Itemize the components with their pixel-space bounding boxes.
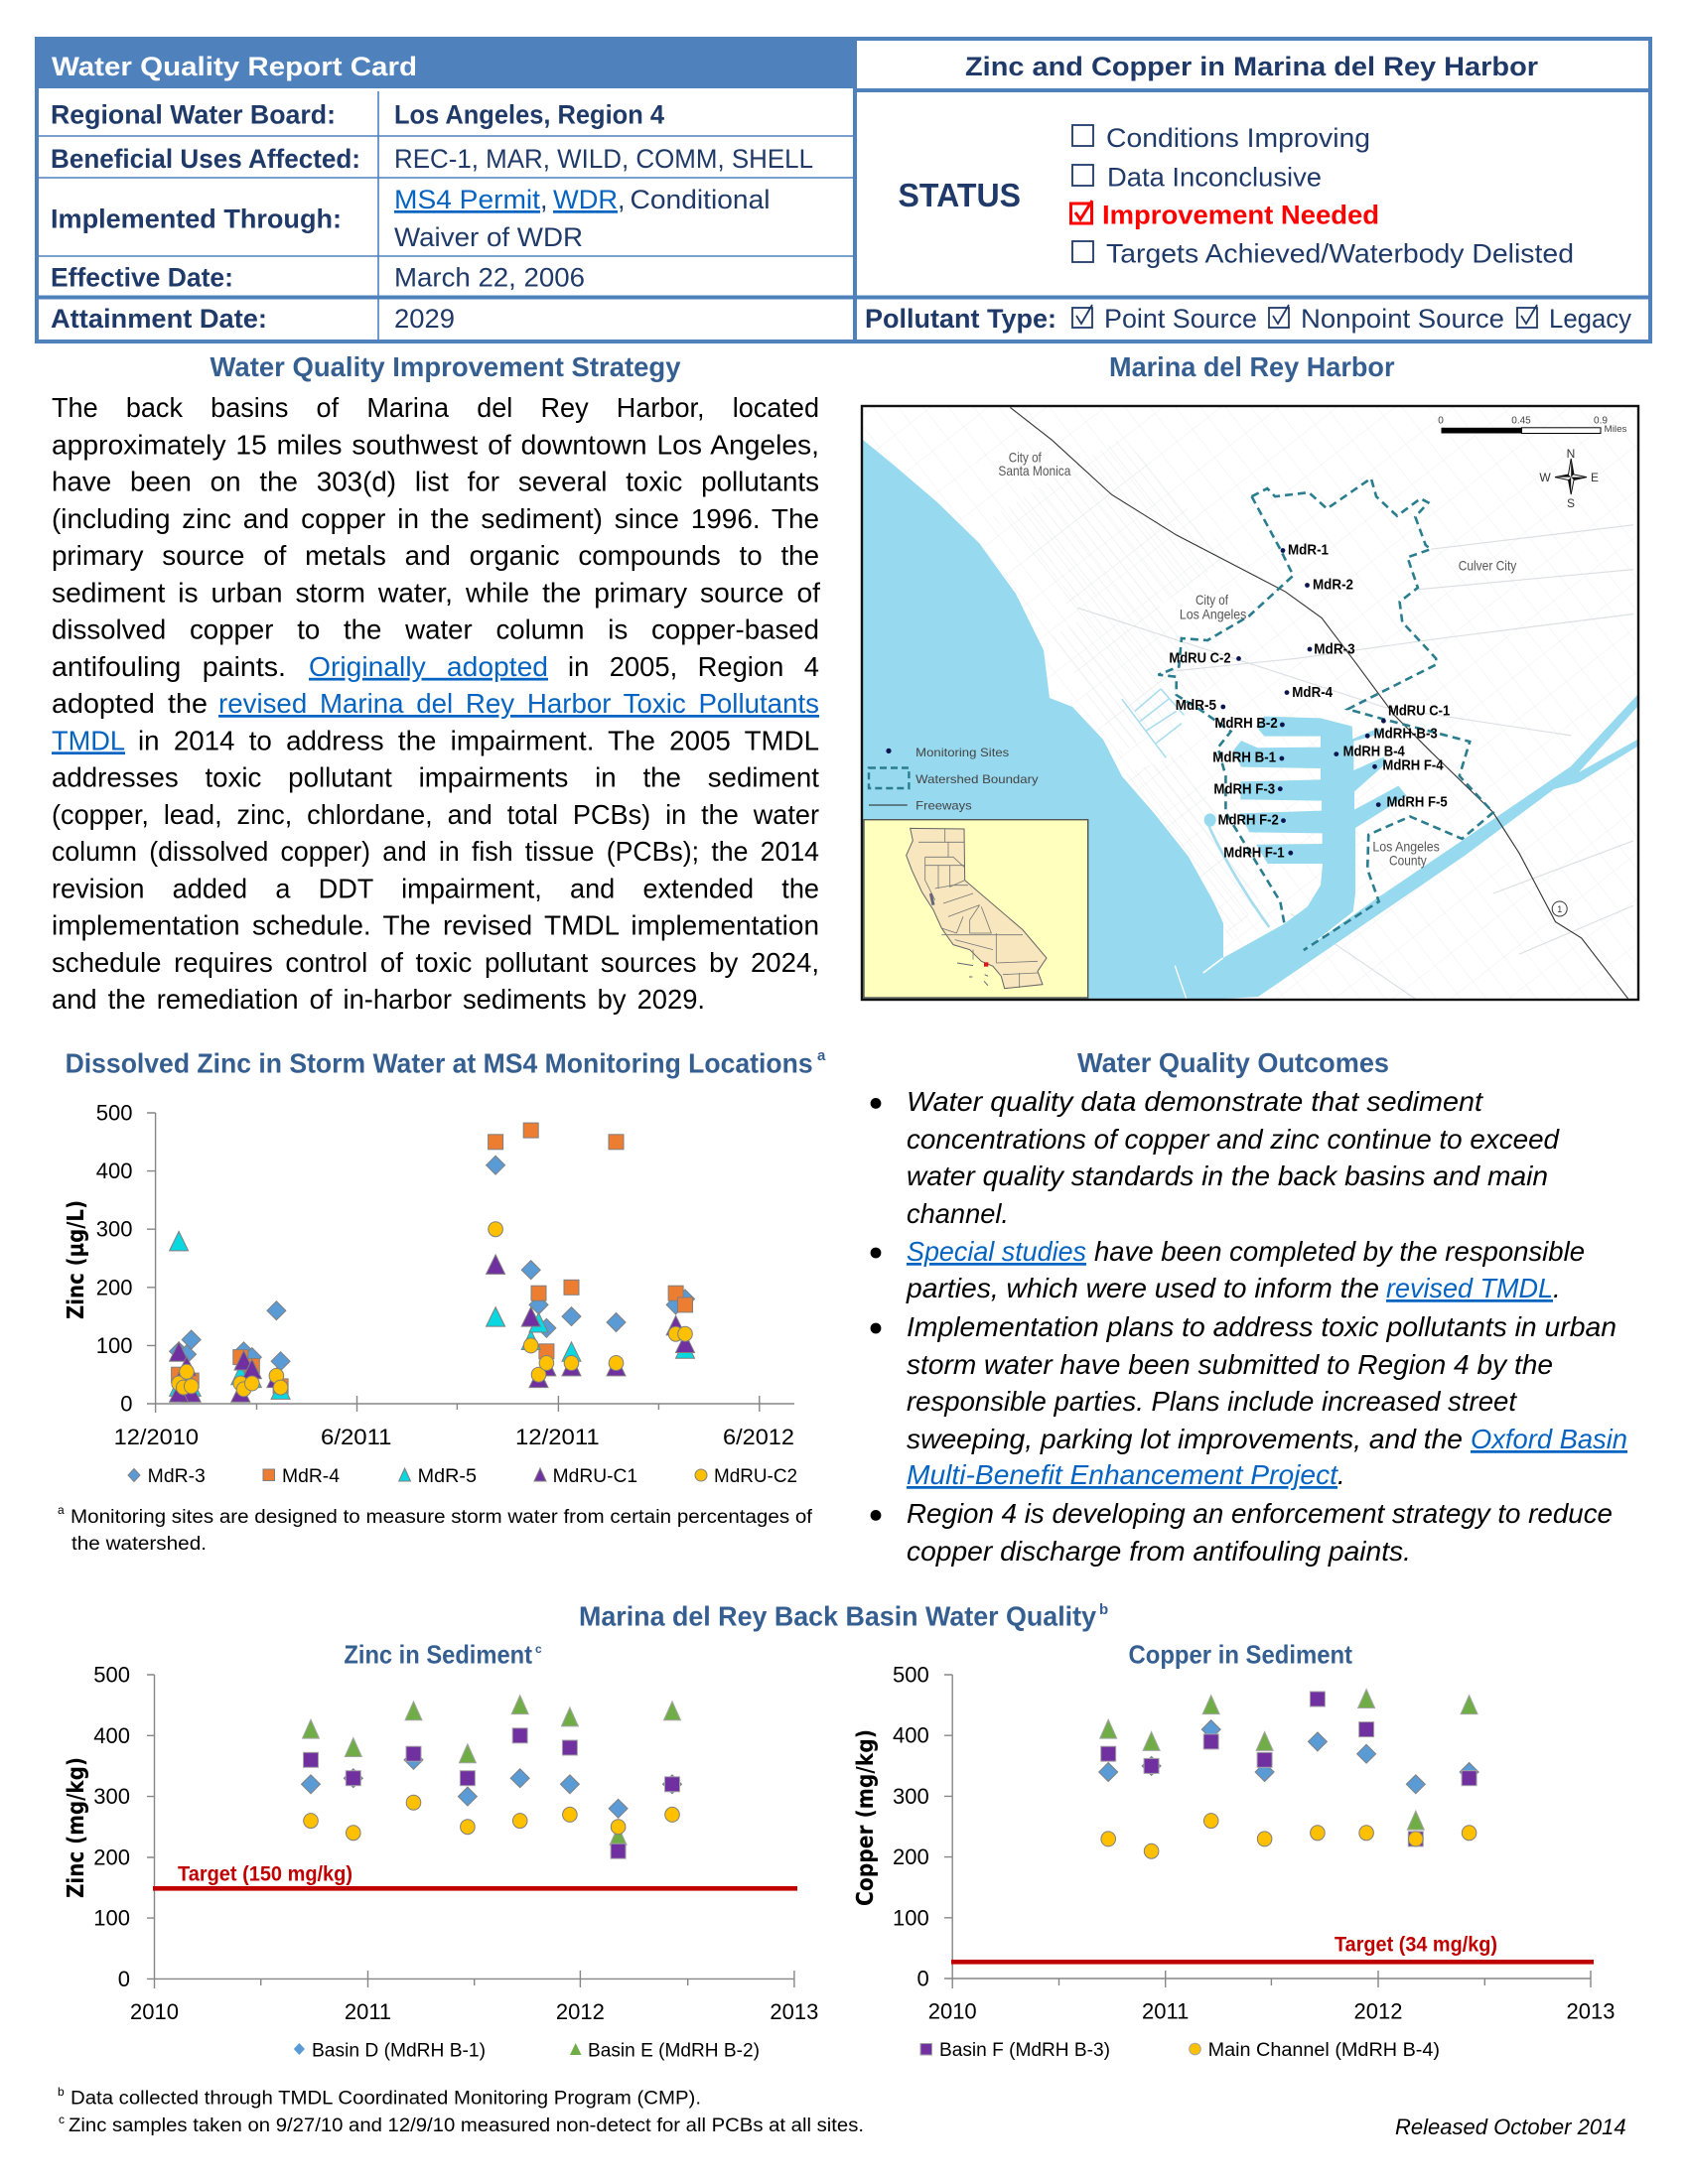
row: attainment date: Attainment Date: bbox=[51, 304, 267, 334]
row: implemented through: MS4 Permit bbox=[394, 185, 541, 214]
footnotes b and c: Data collected through TMDL Coordinated Monitoring Program (CMP). bbox=[70, 2089, 701, 2110]
monitoring sites: MdR-5 bbox=[1176, 697, 1216, 714]
outcome 3: sweeping, parking lot improvements, and the bbox=[907, 1424, 1463, 1454]
strategy paragraph: adopted the bbox=[52, 688, 208, 719]
chart title: c bbox=[535, 1642, 542, 1656]
row: attainment date bbox=[51, 304, 455, 334]
row: regional water board: Regional Water Board: bbox=[51, 99, 336, 129]
place names bbox=[998, 449, 1516, 868]
strategy paragraph: column (dissolved copper) and in fish tissue (PCBs); the 2014 bbox=[52, 836, 819, 867]
legend: MdR-5 bbox=[418, 1466, 477, 1487]
footnotes b and c: b bbox=[58, 2085, 65, 2099]
legend: MdRU-C1 bbox=[553, 1466, 637, 1487]
series: MdRU-C2 bbox=[172, 1222, 692, 1397]
y-axis labels bbox=[96, 1100, 133, 1416]
status: data inconclusive: Data Inconclusive bbox=[1107, 163, 1322, 193]
series: Basin F bbox=[1101, 1692, 1477, 1846]
row: attainment date: 2029 bbox=[394, 304, 455, 334]
map panel bbox=[861, 405, 1639, 1001]
y-axis labels: 200 bbox=[96, 1275, 133, 1299]
outcome 4 bbox=[907, 1498, 1613, 1567]
outcome 3: Multi-Benefit Enhancement Project bbox=[907, 1459, 1338, 1490]
legend bbox=[920, 2040, 1440, 2061]
y-axis labels: 500 bbox=[93, 1662, 130, 1688]
y-axis title: Zinc (mg/kg) bbox=[64, 1757, 89, 1898]
outcome 4: copper discharge from antifouling paints. bbox=[907, 1536, 1411, 1567]
row: implemented through: Waiver of WDR bbox=[394, 222, 583, 252]
chart title: Copper in Sediment bbox=[1128, 1640, 1352, 1670]
status heading: STATUS bbox=[898, 177, 1021, 213]
legend: Basin F (MdRH B-3) bbox=[939, 2040, 1110, 2061]
row: beneficial uses: REC-1, MAR, WILD, COMM, SHELL bbox=[394, 144, 813, 174]
icon: compass: S bbox=[1567, 496, 1575, 510]
release date: Released October 2014 bbox=[1395, 2115, 1626, 2139]
strategy paragraph: sediment is urban storm water, while the primary source of bbox=[52, 577, 820, 608]
place names: Culver City bbox=[1459, 557, 1516, 573]
y-axis labels: 300 bbox=[93, 1784, 130, 1809]
x-axis labels: 2010 bbox=[130, 1999, 179, 2024]
strategy paragraph: TMDL bbox=[52, 725, 125, 755]
strategy paragraph: revision added a DDT impairment, and extended the bbox=[52, 873, 819, 903]
monitoring sites: MdRH F-4 bbox=[1382, 757, 1444, 774]
target line bbox=[153, 1886, 797, 1891]
y-axis labels bbox=[93, 1662, 130, 1991]
chart: copper in sediment bbox=[853, 1640, 1615, 2061]
y-axis labels: 300 bbox=[96, 1217, 133, 1242]
series: Basin E bbox=[1100, 1690, 1477, 1830]
legend: MdR-3 bbox=[148, 1466, 206, 1487]
footnotes b and c: c bbox=[59, 2113, 65, 2126]
outcome 2: revised TMDL bbox=[1386, 1273, 1553, 1303]
x-axis labels bbox=[130, 1999, 818, 2024]
x-axis labels: 12/2010 bbox=[114, 1425, 199, 1449]
outcome 3 bbox=[907, 1311, 1627, 1490]
place names: County bbox=[1389, 852, 1427, 868]
strategy paragraph bbox=[52, 392, 820, 1015]
row: beneficial uses: Beneficial Uses Affected: bbox=[51, 144, 360, 174]
status: improvement needed: Improvement Needed bbox=[1102, 201, 1379, 230]
y-axis labels: 400 bbox=[893, 1723, 929, 1748]
series: Basin E bbox=[302, 1696, 681, 1844]
icon: compass: E bbox=[1591, 471, 1599, 484]
map legend: Freeways bbox=[915, 798, 972, 812]
monitoring sites: MdRU C-2 bbox=[1169, 649, 1231, 666]
y-axis labels: 300 bbox=[893, 1784, 929, 1809]
y-axis title: Zinc (µg/L) bbox=[64, 1200, 89, 1319]
axes bbox=[147, 1113, 794, 1413]
monitoring sites: MdRH B-1 bbox=[1212, 749, 1276, 765]
target label: Target (34 mg/kg) bbox=[1335, 1934, 1497, 1957]
target line bbox=[951, 1960, 1594, 1965]
axes bbox=[944, 1675, 1591, 1988]
icon: empty checkbox bbox=[1072, 125, 1093, 146]
outcome 2: . bbox=[1553, 1273, 1561, 1303]
monitoring sites: MdR-2 bbox=[1313, 577, 1353, 594]
strategy paragraph: in 2014 to address the impairment. The 2005 TMDL bbox=[138, 725, 819, 755]
y-axis labels: 100 bbox=[96, 1333, 133, 1358]
row: regional water board bbox=[51, 99, 664, 129]
icon: compass: W bbox=[1539, 471, 1551, 484]
strategy paragraph: approximately 15 miles southwest of downtown Los Angeles, bbox=[52, 429, 819, 460]
row: implemented through: Conditional bbox=[630, 185, 771, 214]
pollutant type row: Point Source bbox=[1104, 304, 1257, 334]
strategy paragraph: (including zinc and copper in the sediment) since 1996. The bbox=[52, 503, 819, 534]
place names: City of bbox=[1009, 449, 1042, 465]
heading: map: Marina del Rey Harbor bbox=[1109, 351, 1395, 382]
y-axis labels: 200 bbox=[93, 1844, 130, 1869]
strategy paragraph: have been on the 303(d) list for several toxic pollutants bbox=[52, 467, 819, 496]
legend bbox=[294, 2041, 760, 2061]
watershed boundary bbox=[1158, 478, 1493, 950]
chart title: Zinc in Sediment bbox=[344, 1639, 532, 1669]
legend bbox=[128, 1466, 797, 1487]
row: effective date: Effective Date: bbox=[51, 263, 233, 293]
icon: empty checkbox bbox=[1072, 241, 1093, 262]
monitoring sites: MdRH F-2 bbox=[1218, 812, 1279, 829]
outcome 2 bbox=[906, 1236, 1585, 1303]
heading: dissolved zinc chart: Dissolved Zinc in Storm Water at MS4 Monitoring Locations bbox=[66, 1047, 813, 1078]
x-axis labels: 2012 bbox=[556, 1999, 605, 2024]
monitoring sites: MdR-3 bbox=[1314, 641, 1355, 657]
outcome 3: Oxford Basin bbox=[1471, 1424, 1627, 1454]
monitoring sites bbox=[1169, 542, 1450, 862]
footnote a: the watershed. bbox=[71, 1534, 207, 1555]
pollutant type row: Pollutant Type: bbox=[865, 304, 1056, 334]
row: implemented through: Implemented Through: bbox=[51, 205, 342, 234]
series: Main Channel bbox=[304, 1795, 679, 1841]
outcome 3: responsible parties. Plans include increased street bbox=[907, 1386, 1517, 1417]
strategy paragraph: dissolved copper to the water column is copper-based bbox=[52, 614, 819, 645]
monitoring sites: MdR-1 bbox=[1288, 542, 1329, 558]
status: targets achieved: Targets Achieved/Waterbody Delisted bbox=[1106, 238, 1574, 268]
y-axis labels: 0 bbox=[118, 1967, 130, 1991]
place names: Los Angeles bbox=[1372, 839, 1440, 855]
ocean bbox=[863, 440, 1223, 999]
y-axis labels: 0 bbox=[120, 1392, 133, 1416]
y-axis labels: 100 bbox=[93, 1906, 130, 1931]
outcome 2: Special studies bbox=[907, 1236, 1086, 1267]
map legend: Monitoring Sites bbox=[915, 746, 1009, 759]
footnote a: a bbox=[58, 1503, 65, 1517]
status checklist bbox=[1070, 123, 1574, 268]
row: implemented through bbox=[51, 185, 771, 252]
x-axis labels: 2011 bbox=[345, 1999, 391, 2024]
series: MdRU-C1 bbox=[170, 1255, 695, 1402]
heading: back basin section: b bbox=[1099, 1601, 1108, 1618]
row: implemented through: , bbox=[540, 185, 548, 214]
icon: route 1 shield bbox=[1552, 901, 1567, 916]
outcome 3: . bbox=[1337, 1459, 1345, 1490]
y-axis title: Copper (mg/kg) bbox=[853, 1729, 879, 1906]
icon: route 1 shield: 1 bbox=[1557, 904, 1562, 914]
y-axis labels: 400 bbox=[96, 1159, 133, 1183]
California locator inset bbox=[864, 820, 1088, 998]
monitoring sites: MdRH B-4 bbox=[1343, 744, 1405, 760]
series: Main Channel bbox=[1101, 1814, 1477, 1858]
panel: table frame bbox=[35, 37, 1652, 343]
strategy paragraph: (copper, lead, zinc, chlordane, and total PCBs) in the water bbox=[52, 799, 819, 830]
monitoring sites: MdRH F-1 bbox=[1223, 845, 1285, 862]
bullets bbox=[871, 1098, 881, 1521]
strategy paragraph: implementation schedule. The revised TMDL implementation bbox=[52, 909, 819, 941]
map legend bbox=[869, 746, 1039, 812]
y-axis labels: 400 bbox=[93, 1723, 130, 1748]
monitoring sites: MdRH-B-3 bbox=[1374, 725, 1438, 742]
outcome 1: Water quality data demonstrate that sediment bbox=[907, 1086, 1483, 1117]
monitoring sites: MdR-4 bbox=[1292, 684, 1334, 701]
footnotes b and c: Zinc samples taken on 9/27/10 and 12/9/10 measured non-detect for all PCBs at all sites. bbox=[69, 2116, 864, 2136]
x-axis labels: 6/2012 bbox=[723, 1425, 794, 1449]
y-axis labels: 100 bbox=[893, 1905, 929, 1930]
outcome 4: Region 4 is developing an enforcement strategy to reduce bbox=[907, 1498, 1613, 1529]
x-axis labels: 6/2011 bbox=[321, 1425, 391, 1449]
heading: strategy: Water Quality Improvement Strategy bbox=[211, 351, 681, 382]
harbor water bbox=[1155, 717, 1407, 1000]
strategy paragraph: The back basins of Marina del Rey Harbor, located bbox=[52, 392, 819, 423]
strategy paragraph: schedule requires control of toxic pollutant sources by 2024, bbox=[52, 947, 819, 978]
venice canals bbox=[1122, 689, 1185, 757]
pollutant type row: Legacy bbox=[1549, 304, 1631, 334]
outcome 3: storm water have been submitted to Region 4 by the bbox=[907, 1349, 1553, 1380]
legend: Basin E (MdRH B-2) bbox=[588, 2041, 760, 2061]
table title: Water Quality Report Card bbox=[52, 52, 417, 81]
monitoring sites: MdRH F-3 bbox=[1213, 781, 1275, 798]
series: Basin D bbox=[1099, 1720, 1478, 1794]
x-axis labels: 2013 bbox=[1567, 1999, 1615, 2024]
map base bbox=[861, 405, 1639, 1001]
icon: empty checkbox bbox=[1072, 165, 1093, 186]
scale bar bbox=[1438, 416, 1627, 434]
axes bbox=[147, 1675, 794, 1988]
outcome 1: water quality standards in the back basins and main bbox=[907, 1160, 1548, 1191]
icon: compass bbox=[1539, 447, 1599, 510]
outcome 2: have been completed by the responsible bbox=[1094, 1236, 1585, 1267]
heading: dissolved zinc chart: a bbox=[817, 1047, 826, 1064]
row: beneficial uses bbox=[51, 144, 813, 174]
place names: City of bbox=[1196, 592, 1228, 608]
legend: Main Channel (MdRH B-4) bbox=[1208, 2040, 1440, 2061]
pollutant type row bbox=[865, 304, 1631, 334]
outcome 1 bbox=[907, 1086, 1561, 1229]
status: conditions improving: Conditions Improving bbox=[1106, 123, 1370, 153]
pollutant type row: Nonpoint Source bbox=[1301, 304, 1504, 334]
place names: Los Angeles bbox=[1180, 606, 1246, 621]
outcome 2: parties, which were used to inform the bbox=[906, 1273, 1379, 1303]
map legend: Watershed Boundary bbox=[915, 772, 1039, 786]
row: regional water board: Los Angeles, Region 4 bbox=[394, 99, 664, 129]
icon: compass: N bbox=[1567, 447, 1575, 461]
strategy paragraph: primary source of metals and organic compounds to the bbox=[52, 540, 819, 571]
outcome 1: concentrations of copper and zinc continue to exceed bbox=[907, 1124, 1561, 1155]
scale bar: Miles bbox=[1605, 424, 1627, 434]
monitoring sites: MdRH F-5 bbox=[1386, 794, 1448, 811]
footnote a: Monitoring sites are designed to measure storm water from certain percentages of bbox=[70, 1507, 813, 1528]
y-axis labels: 0 bbox=[916, 1966, 929, 1991]
chart: dissolved zinc bbox=[64, 1100, 797, 1487]
strategy paragraph: and the remediation of in-harbor sediments by 2029. bbox=[52, 984, 705, 1015]
footnote a bbox=[58, 1503, 813, 1555]
water quality outcomes bbox=[871, 1047, 1627, 1567]
monitoring sites: MdRU C-1 bbox=[1388, 703, 1450, 719]
creek bbox=[1223, 695, 1637, 999]
outcome 1: channel. bbox=[907, 1198, 1009, 1229]
place names: Santa Monica bbox=[998, 463, 1071, 478]
x-axis labels: 12/2011 bbox=[515, 1425, 600, 1449]
heading: back basin section: Marina del Rey Back Basin Water Quality bbox=[579, 1600, 1096, 1632]
strategy paragraph: addresses toxic pollutant impairments in the sediment bbox=[52, 762, 819, 792]
series: Basin D bbox=[302, 1750, 681, 1818]
map frame bbox=[862, 406, 1638, 1000]
row: effective date bbox=[51, 263, 585, 293]
freeway bbox=[1010, 407, 1628, 999]
legend: Basin D (MdRH B-1) bbox=[312, 2041, 486, 2061]
legend: MdR-4 bbox=[282, 1466, 340, 1487]
scale bar: 0.45 bbox=[1511, 416, 1531, 427]
footnotes b and c bbox=[58, 2085, 864, 2136]
monitoring sites: MdRH B-2 bbox=[1214, 715, 1278, 732]
series: MdR-5 bbox=[170, 1231, 695, 1399]
strategy paragraph: Originally adopted bbox=[309, 651, 548, 682]
series: Basin F bbox=[304, 1728, 679, 1858]
x-axis labels bbox=[114, 1425, 794, 1449]
y-axis labels: 200 bbox=[893, 1844, 929, 1869]
report card table bbox=[35, 37, 1652, 343]
series: MdR-3 bbox=[170, 1156, 695, 1371]
outcome 3: Implementation plans to address toxic pollutants in urban bbox=[907, 1311, 1617, 1342]
strategy paragraph: revised Marina del Rey Harbor Toxic Pollutants bbox=[218, 688, 819, 719]
strategy paragraph: in 2005, Region 4 bbox=[568, 651, 819, 682]
report title: Zinc and Copper in Marina del Rey Harbor bbox=[965, 52, 1539, 81]
series: MdR-4 bbox=[172, 1123, 693, 1394]
x-axis labels: 2012 bbox=[1354, 1999, 1402, 2024]
row: implemented through: , bbox=[618, 185, 626, 214]
y-axis labels: 500 bbox=[893, 1662, 929, 1688]
x-axis labels: 2013 bbox=[770, 1999, 818, 2024]
scale bar: 0 bbox=[1438, 416, 1444, 427]
scale bar: 0.9 bbox=[1594, 416, 1608, 427]
strategy paragraph: antifouling paints. bbox=[52, 651, 286, 682]
row: implemented through: WDR bbox=[553, 185, 618, 214]
x-axis labels: 2011 bbox=[1142, 1999, 1189, 2024]
target label: Target (150 mg/kg) bbox=[178, 1863, 352, 1886]
row: effective date: March 22, 2006 bbox=[394, 263, 585, 293]
x-axis labels bbox=[928, 1999, 1615, 2024]
chart: zinc in sediment bbox=[64, 1639, 818, 2061]
y-axis labels: 500 bbox=[96, 1100, 133, 1126]
legend: MdRU-C2 bbox=[714, 1466, 797, 1487]
x-axis labels: 2010 bbox=[928, 1999, 977, 2024]
icon: checked red box bbox=[1070, 201, 1092, 223]
heading: outcomes: Water Quality Outcomes bbox=[1077, 1047, 1389, 1078]
y-axis labels bbox=[893, 1662, 929, 1991]
